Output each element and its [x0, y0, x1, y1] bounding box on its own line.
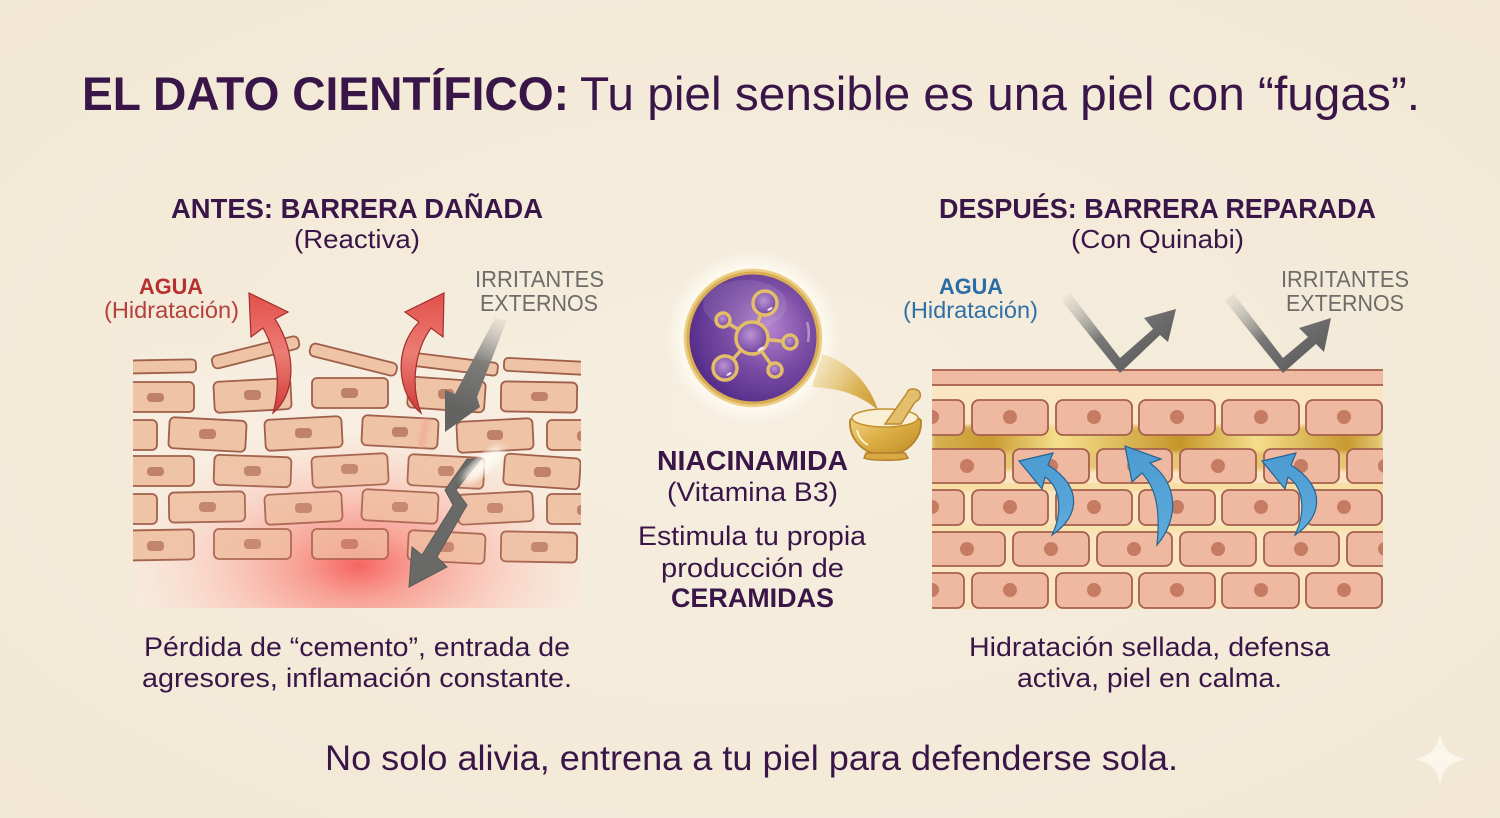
caption: después	[969, 632, 1331, 693]
panel: después, barrera reparada	[903, 193, 1409, 693]
heading: niacinamida: (Vitamina B3)	[667, 477, 838, 507]
icon: molecule medallion	[684, 269, 822, 407]
arrow: red water loss right	[401, 293, 444, 413]
arrow: blue water retained 2	[1125, 446, 1173, 545]
label: agua hidratación, pérdida: AGUA	[139, 274, 203, 299]
arrow: grey irritant entering	[445, 318, 507, 432]
caption: antes: Pérdida de “cemento”, entrada de	[144, 632, 570, 662]
illustration: repaired skin barrier	[915, 370, 1407, 609]
caption: antes: agresores, inflamación constante.	[142, 663, 572, 693]
arrow: blue water retained 1	[1019, 453, 1074, 535]
panel: niacinamida centre	[638, 250, 921, 613]
footer message: No solo alivia, entrena a tu piel para defenderse sola.	[325, 739, 1178, 778]
medallion glow	[665, 250, 841, 426]
heading: después	[939, 193, 1376, 254]
text: estimula ceramidas	[638, 521, 867, 613]
flash	[458, 442, 508, 488]
title	[82, 67, 1420, 120]
cells	[915, 400, 1407, 608]
heading: antes: ANTES: BARRERA DAÑADA	[171, 193, 543, 224]
label: irritantes externos: EXTERNOS	[1286, 290, 1404, 316]
panel: antes, barrera dañada	[104, 193, 604, 693]
cells	[115, 376, 597, 564]
icon: gold mortar and pestle	[850, 389, 921, 460]
text: estimula ceramidas: producción de	[661, 553, 844, 583]
gold ceramide band	[932, 426, 1383, 454]
gold beam to mortar	[812, 354, 878, 410]
small crack	[418, 418, 429, 448]
label: irritantes externos	[1281, 266, 1409, 316]
heading: niacinamida	[657, 445, 848, 507]
arrow: grey irritant zigzag	[409, 459, 481, 587]
caption: después: Hidratación sellada, defensa	[969, 632, 1331, 662]
label: agua hidratación, pérdida	[104, 274, 239, 323]
label: irritantes externos	[475, 266, 604, 316]
caption: antes	[142, 632, 572, 693]
top protective layer	[925, 370, 1390, 385]
heading: antes: (Reactiva)	[294, 224, 420, 254]
heading: niacinamida: NIACINAMIDA	[657, 445, 848, 476]
icon: sparkle	[1414, 732, 1467, 785]
heading: después: (Con Quinabi)	[1071, 224, 1244, 254]
heading: antes	[171, 193, 543, 254]
label: agua hidratación, sellada: AGUA	[939, 274, 1003, 299]
label: agua hidratación, sellada	[903, 274, 1038, 323]
caption: después: activa, piel en calma.	[1017, 663, 1282, 693]
redness overlay	[170, 455, 546, 564]
illustration: damaged skin barrier	[115, 335, 597, 608]
text: estimula ceramidas: CERAMIDAS	[671, 583, 834, 613]
label: irritantes externos: EXTERNOS	[480, 290, 598, 316]
arrow: grey irritant deflected 1	[1062, 293, 1176, 373]
label: agua hidratación, pérdida: (Hidratación)	[104, 297, 239, 323]
text: estimula ceramidas: Estimula tu propia	[638, 521, 867, 551]
label: irritantes externos: IRRITANTES	[475, 266, 604, 292]
top flakes	[120, 335, 594, 377]
arrow: red water loss left	[249, 293, 291, 413]
title: EL DATO CIENTÍFICO:	[82, 67, 569, 120]
arrow: grey irritant deflected 2	[1225, 293, 1331, 373]
title: Tu piel sensible es una piel con “fugas”.	[580, 67, 1420, 120]
label: agua hidratación, sellada: (Hidratación)	[903, 297, 1038, 323]
label: irritantes externos: IRRITANTES	[1281, 266, 1409, 292]
heading: después: DESPUÉS: BARRERA REPARADA	[939, 193, 1376, 224]
arrow: blue water retained 3	[1262, 453, 1317, 535]
